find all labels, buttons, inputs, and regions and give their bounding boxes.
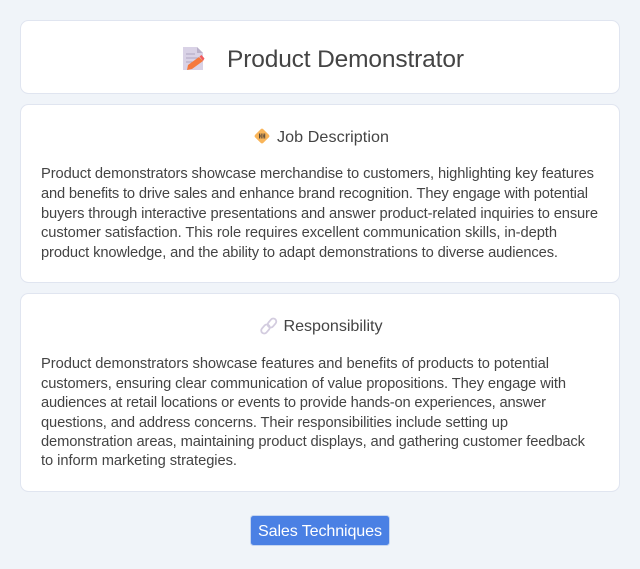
title: Product Demonstrator — [227, 46, 464, 73]
heading: job description: Job Description — [277, 128, 389, 146]
text block: responsibility: customers, ensuring clear communication of value propositions. They engage with — [41, 376, 566, 392]
button: sales techniques — [250, 516, 390, 546]
icon: diamond sign — [254, 128, 270, 144]
heading: responsibility: Responsibility — [284, 317, 383, 335]
text block: responsibility: demonstration areas, maintaining product displays, and gathering customer feedback — [41, 434, 586, 450]
icon: document with pencil — [183, 47, 204, 70]
button: sales techniques: Sales Techniques — [258, 522, 382, 540]
text block: responsibility — [41, 356, 586, 469]
panel: job description — [20, 104, 620, 282]
text block: job description: and benefits to drive sales and enhance brand recognition. They engage with potential — [41, 186, 588, 202]
text block: job description — [41, 166, 598, 261]
icon: chain link — [260, 317, 278, 335]
text block: responsibility: Product demonstrators showcase features and benefits of products to potential — [41, 356, 549, 372]
text block: responsibility: to inform marketing strategies. — [41, 453, 237, 469]
text block: job description: buyers through interactive presentations and answer product-related inquiries to ensure — [41, 206, 598, 222]
panel: title card — [20, 20, 620, 94]
panel: responsibility — [20, 294, 620, 492]
text block: job description: Product demonstrators showcase merchandise to customers, highlighting key features — [41, 166, 594, 182]
text block: job description: product knowledge, and the ability to adapt demonstrations to diverse audiences. — [41, 245, 558, 261]
text block: responsibility: questions, and address concerns. Their responsibilities include setting up — [41, 415, 508, 431]
text block: responsibility: audiences at retail locations or events to provide hands-on experiences, answer — [41, 395, 546, 411]
text block: job description: customer satisfaction. This role requires excellent communication skills, in-depth — [41, 225, 557, 241]
